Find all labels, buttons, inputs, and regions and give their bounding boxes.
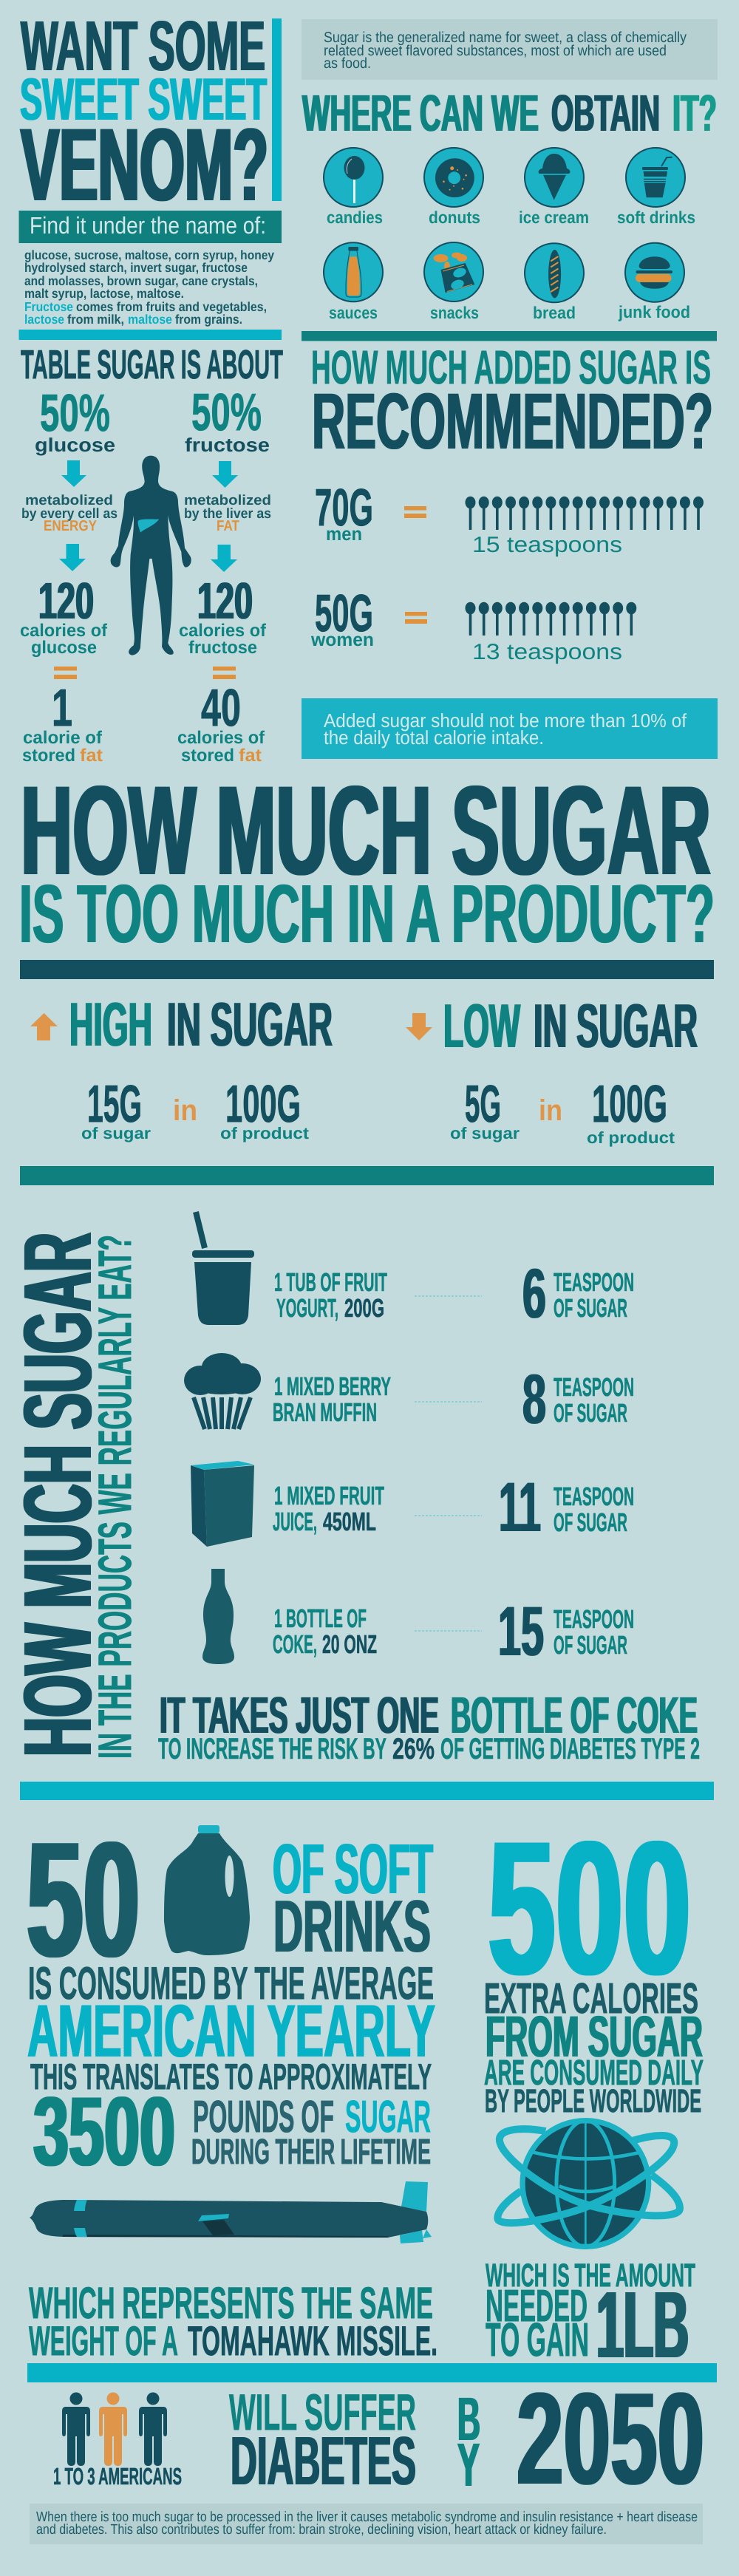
heading: vertical how much sugar: HOW MUCH SUGAR [3,1233,112,1756]
column: glucose: ENERGY [44,518,98,534]
text block: amount needed to gain one pound: NEEDED [486,2280,588,2331]
row: juice: 450ML [323,1507,376,1536]
panel: low in sugar: of product [587,1128,675,1147]
text block: amount needed to gain one pound: TO GAIN [486,2313,589,2366]
row: juice: 1 MIXED FRUIT [274,1482,384,1510]
row: women recommendation [310,585,636,664]
row: coke bottle: COKE, [273,1630,317,1659]
column: fructose: calories of [177,728,265,748]
row: yogurt: 1 TUB OF FRUIT [274,1268,387,1297]
row: coke bottle: 20 ONZ [322,1630,377,1659]
column: fructose: stored [181,746,234,766]
column: fructose: fructose [188,638,257,658]
panel: sugar definition [302,19,718,80]
row: juice: OF SUGAR [554,1508,627,1537]
column: fructose: by the liver as [184,506,271,522]
column: glucose: 120 [38,572,94,630]
panel: low in sugar [406,991,698,1147]
column: glucose: fat [80,746,103,766]
text block: five hundred extra calories [484,1801,704,2119]
row: muffin: OF SUGAR [554,1399,627,1428]
text block: one bottle of coke risk: TO INCREASE THE RISK BY [158,1733,386,1765]
panel: high in sugar: of product [220,1124,310,1142]
text block: sugar names: glucose, sucrose, maltose, corn syrup, honey [24,248,274,262]
panel: low in sugar: LOW [443,991,520,1060]
text block: amount needed to gain one pound [486,2258,695,2378]
row: yogurt: YOGURT, [276,1294,338,1323]
icon: candies [324,148,383,227]
panel: low in sugar: 5G [465,1075,501,1134]
column: glucose: by every cell as [21,506,118,522]
icon: bread [525,243,584,322]
row: coke bottle [202,1569,634,1671]
panel: find it under the name of: Find it under the name of: [30,212,266,239]
icon: tomahawk missile [30,2181,432,2243]
icon: globe with orbits [497,2121,680,2246]
heading: will suffer diabetes by 2050: DIABETES [231,2422,416,2499]
column: fructose: fat [239,746,262,766]
panel: sugar definition: Sugar is the generalized name for sweet, a class of chemically [324,30,687,46]
text block: fifty soft drinks: DRINKS [273,1885,431,1968]
row: yogurt [192,1212,634,1333]
column: fructose: 120 [197,572,253,630]
row: men recommendation: 15 teaspoons [472,533,622,557]
text block: sugar names: from grains. [175,312,242,327]
column: fructose [177,384,271,766]
row: women recommendation: women [310,630,374,650]
row: men recommendation: 70G [315,479,373,537]
callout: ten percent of daily calories: the daily total calorie intake. [324,726,544,749]
column: fructose: 40 [201,679,241,737]
title: want some sweet sweet venom: WANT SOME [21,7,265,86]
callout: ten percent of daily calories [302,698,718,759]
text block: american yearly: DURING THEIR LIFETIME [191,2133,431,2172]
heading: vertical how much sugar: IN THE PRODUCTS WE REGULARLY EAT? [89,1235,141,1759]
title: want some sweet sweet venom [20,7,268,222]
icon: junk food: junk food [618,302,690,321]
column: glucose: glucose [35,434,115,456]
text block: sugar names: hydrolysed starch, invert sugar, fructose [24,260,248,275]
text block: sugar names: from milk, [67,312,124,327]
icon: one in three americans: 1 TO 3 AMERICANS [53,2463,182,2490]
text block: american yearly: THIS TRANSLATES TO APPROXIMATELY [30,2057,432,2097]
heading: how much added sugar is recommended [311,341,713,466]
text block: one bottle of coke risk: 26% [392,1733,435,1765]
text block: american yearly: 3500 [33,2077,175,2187]
title: want some sweet sweet venom: VENOM? [21,106,268,222]
panel: sugar definition: related sweet flavored substances, most of which are used [324,43,667,59]
icon: candies: candies [327,208,383,227]
icon: junk food [618,243,690,321]
divider bar teal [20,1166,714,1185]
text block: american yearly: POUNDS OF [193,2091,334,2141]
row: coke bottle: OF SUGAR [554,1631,627,1660]
row: coke bottle: 1 BOTTLE OF [274,1604,367,1633]
row: women recommendation: 13 teaspoons [472,640,622,664]
row: muffin: BRAN MUFFIN [273,1398,377,1427]
icon: ice cream [519,148,589,227]
column: glucose: 1 [52,679,72,737]
row: yogurt: TEASPOON [554,1268,634,1297]
divider bar dark [20,960,714,979]
text block: american yearly [27,1958,435,2187]
panel: low in sugar: 100G [592,1075,667,1134]
icon: donuts: donuts [429,208,480,227]
text block: fifty soft drinks: 50 [27,1808,140,1991]
column: glucose: metabolized [25,493,113,508]
text block: sugar names: malt syrup, lactose, maltose. [24,286,184,301]
panel: high in sugar: 100G [225,1075,301,1134]
heading: will suffer diabetes by 2050: Y [457,2430,480,2499]
icon: soft drink jug [164,1825,250,1955]
panel: high in sugar: in [173,1094,197,1127]
text block: tomahawk weight [29,2278,437,2364]
icon: soft drinks [617,148,695,227]
icon: bread: bread [533,303,576,322]
heading: will suffer diabetes by 2050: WILL SUFFER [229,2384,416,2441]
row: juice [191,1461,634,1547]
column: glucose: calorie of [23,728,103,748]
heading: will suffer diabetes by 2050: B [457,2385,480,2453]
row: muffin: 8 [522,1360,546,1439]
icon: human body with liver [111,456,191,655]
row: juice: 11 [499,1468,541,1547]
column: glucose [20,384,118,766]
text block: tomahawk weight: TOMAHAWK MISSILE. [188,2317,437,2364]
text block: fifty soft drinks [27,1808,433,1991]
text block: sugar names: and molasses, brown sugar, cane crystals, [24,273,258,288]
panel: high in sugar: 15G [87,1075,142,1134]
panel: high in sugar: IN SUGAR [167,989,333,1059]
heading: where can we obtain it: WHERE CAN WE [302,84,539,142]
icon: one in three americans [53,2393,182,2490]
panel: low in sugar: in [539,1094,562,1127]
heading: table sugar is about: TABLE SUGAR IS ABOUT [21,341,283,387]
heading: how much sugar is too much in a product [19,760,715,960]
text block: american yearly: AMERICAN YEARLY [27,1990,435,2073]
title: want some sweet sweet venom: SWEET SWEET [20,67,267,133]
divider bar cyan wide [27,2363,717,2382]
icon: donuts [424,148,483,227]
heading: will suffer diabetes by 2050 [229,2365,704,2512]
row: yogurt: 6 [522,1255,546,1333]
row: coke bottle: 15 [498,1592,544,1671]
panel: high in sugar: HIGH [69,989,152,1059]
text block: sugar names [24,248,274,327]
text block: sugar names: comes from fruits and vegetables, [76,299,267,314]
row: men recommendation [315,479,704,557]
row: men recommendation: men [326,524,362,545]
row: yogurt: 200G [344,1294,384,1323]
icon: sauces [324,242,383,322]
icon: snacks [424,242,483,322]
row: muffin: 1 MIXED BERRY [274,1372,391,1401]
divider bar cyan [20,1782,714,1800]
text block: sugar names: Fructose [24,299,73,314]
column: glucose: glucose [31,638,97,658]
title side bar [272,18,282,201]
heading: vertical how much sugar [3,1233,141,1759]
icon: ice cream: ice cream [519,208,589,227]
row: yogurt: OF SUGAR [554,1294,627,1323]
text block: fifty soft drinks: OF SOFT [273,1830,433,1909]
column: fructose: FAT [217,518,239,534]
icon: soft drinks: soft drinks [617,208,695,227]
row: muffin: TEASPOON [554,1373,634,1402]
text block: one bottle of coke risk: IT TAKES JUST ONE [160,1686,439,1744]
text block: tomahawk weight: WHICH REPRESENTS THE SAME [29,2278,433,2328]
panel: high in sugar [30,989,333,1142]
text block: tomahawk weight: WEIGHT OF A [29,2317,178,2364]
column: fructose: 50% [191,384,262,442]
panel: low in sugar: of sugar [450,1124,520,1142]
text block: one bottle of coke risk [158,1686,700,1765]
column: fructose: metabolized [184,493,271,508]
text block: american yearly: SUGAR [345,2091,431,2141]
panel: health consequences note [30,2504,703,2544]
column: glucose: calories of [20,621,108,641]
callout: ten percent of daily calories: Added sugar should not be more than 10% of [324,709,687,732]
divider bar left [19,330,282,340]
row: women recommendation: 50G [315,585,373,643]
panel: health consequences note: and diabetes. This also contributes to suffer from: brain stroke, declining vision, heart attack or kidney failure. [36,2522,607,2538]
text block: sugar names: lactose [24,312,64,327]
row: coke bottle: TEASPOON [554,1605,634,1634]
row: juice: JUICE, [273,1507,317,1536]
row: juice: TEASPOON [554,1482,634,1511]
icon: snacks: snacks [430,303,479,322]
text block: sugar names: maltose [128,312,172,327]
column: fructose: fructose [185,434,270,456]
column: glucose: 50% [40,384,110,443]
divider bar right [302,331,717,341]
icon: sauces: sauces [329,303,378,322]
row: muffin [184,1353,634,1439]
panel: high in sugar: of sugar [81,1124,151,1142]
column: fructose: calories of [179,621,267,641]
column: glucose: stored [22,746,75,766]
panel: sugar definition: as food. [324,55,371,72]
